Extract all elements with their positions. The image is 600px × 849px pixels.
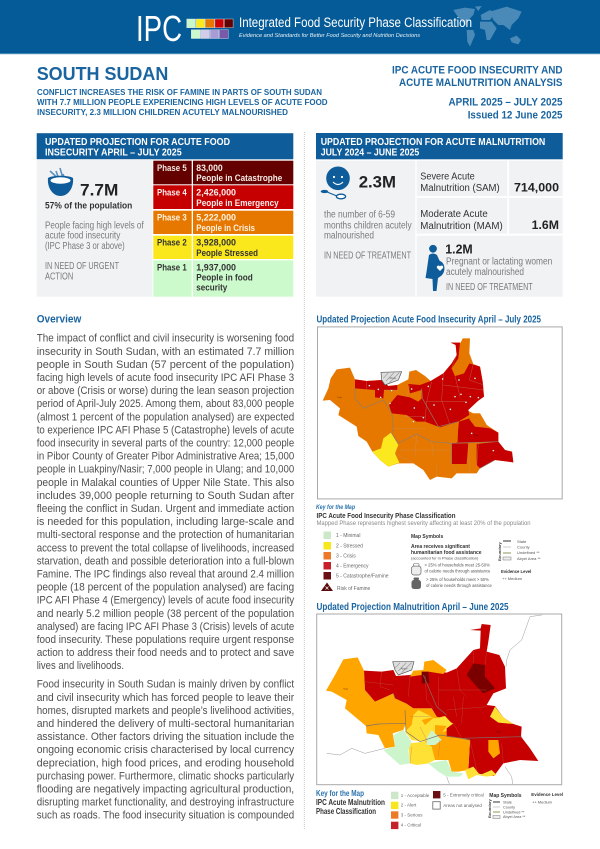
evidence level	[531, 792, 563, 804]
description: ACTION	[45, 271, 73, 282]
malnutrition swatches: 3 - Serious	[401, 812, 423, 818]
map symbols: humanitarian food assistance	[411, 550, 482, 556]
panel heading	[37, 133, 293, 159]
organisation name: Integrated Food Security Phase Classification	[239, 15, 472, 30]
text block: overview paragraph 2: Food insecurity in South Sudan is mainly driven by conflict	[37, 679, 294, 691]
phase swatches: 1 - Minimal	[336, 533, 360, 539]
legend: malnutrition map key: IPC Acute Malnutrition	[316, 798, 385, 807]
Abyei not analysed	[393, 662, 414, 675]
phase 4 row	[153, 185, 293, 209]
subtitle: INSECURITY, 2.3 MILLION CHILDREN ACUTELY MALNOURISHED	[37, 107, 288, 117]
boundary key: County	[517, 544, 530, 550]
phase 2 row	[153, 236, 293, 259]
phase 1 row: security	[196, 283, 228, 294]
green acceptable areas	[383, 730, 463, 777]
map: acute malnutrition	[317, 614, 562, 785]
map symbols: of calorie needs through assistance	[426, 583, 493, 588]
phase 5 row: Phase 5	[157, 163, 187, 174]
panel: acute malnutrition	[316, 133, 563, 297]
text block: overview paragraph 1: IPC AFI Phase 4 (Emergency) levels of acute food insecurity	[37, 595, 295, 607]
text block: overview paragraph 1: food insecurity. These populations require urgent response	[37, 634, 294, 646]
phase 5 row	[153, 161, 293, 184]
heading: malnutrition map: Updated Projection Malnutrition April – June 2025	[316, 602, 509, 613]
Abyei not analysed: Abyei	[401, 666, 408, 670]
red critical area	[364, 624, 538, 776]
icon: bowl of grain	[48, 168, 73, 196]
evidence level: Evidence Level	[531, 792, 563, 797]
stat caption: 57% of the population	[45, 199, 133, 210]
text block: overview paragraph 2: ongoing economic crisis characterised by local currency	[37, 744, 295, 756]
phase swatches	[324, 532, 389, 580]
phase swatches: 2 - Stressed	[336, 544, 363, 550]
orange western area	[326, 657, 406, 748]
phase 5 row: 83,000	[196, 163, 223, 174]
phase 2 row: People Stressed	[196, 248, 258, 259]
text block: overview paragraph 2: flooding are negatively impacting agricultural production,	[37, 784, 294, 796]
panel heading: UPDATED PROJECTION FOR ACUTE MALNUTRITION	[321, 137, 545, 148]
orange spots	[422, 717, 447, 735]
legend: food insecurity map key: Key for the Map	[316, 504, 355, 511]
analysis title and dates	[392, 64, 563, 121]
text block: overview paragraph 1: people in Malakal counties of Upper Nile State. This also	[37, 477, 294, 489]
map symbols: County	[503, 806, 515, 810]
text block: overview paragraph 1: to experience IPC AFI Phase 5 (Catastrophe) levels of acute	[37, 424, 294, 436]
state boundaries	[366, 675, 522, 742]
orange patches	[443, 358, 491, 442]
description: IN NEED OF TREATMENT	[324, 250, 411, 261]
map symbols: (accounted for in Phase classification)	[411, 556, 479, 560]
stat: pregnant or lactating women: acutely malnourished	[446, 267, 524, 278]
malnutrition swatches: Areas not analysed	[443, 803, 482, 808]
icon: risk of famine	[321, 582, 371, 592]
panel heading: JULY 2024 – JUNE 2025	[321, 148, 419, 159]
phase 4 row: People in Emergency	[196, 198, 279, 209]
text block: overview paragraph 2: assistance. Other factors driving the situation include the	[37, 731, 294, 743]
map symbols: Map Symbols	[489, 793, 522, 799]
subtitle: CONFLICT INCREASES THE RISK OF FAMINE IN PARTS OF SOUTH SUDAN	[37, 87, 322, 97]
analysis title and dates: APRIL 2025 – JULY 2025	[448, 97, 562, 109]
malnutrition swatches: 2 - Alert	[401, 802, 417, 808]
orange base	[323, 338, 513, 480]
text block: overview paragraph 1: fleeing the conflict in Sudan. Urgent and immediate action	[37, 503, 294, 515]
header banner	[0, 0, 600, 54]
analysis title and dates: Issued 12 June 2025	[468, 109, 562, 121]
map symbols: Undefined **	[503, 810, 525, 814]
icon: child with spoon	[321, 166, 350, 199]
text block: overview paragraph 2: such as roads. The food insecurity situation is compounded	[37, 810, 294, 822]
text block: overview paragraph 2: homes, disrupted markets and people’s livelihood activities,	[37, 705, 294, 717]
map symbols	[411, 534, 493, 589]
text block: overview paragraph 1: multi-sectoral response and the protection of humanitarian	[37, 529, 294, 541]
moderate acute malnutrition: Moderate Acute	[420, 209, 488, 220]
county labels: Raga	[337, 397, 343, 399]
text block: overview paragraph 1: food insecurity in several parts of the country: 12,000 people	[37, 438, 294, 450]
county labels: Raga	[343, 689, 349, 691]
yellow alert areas	[405, 707, 513, 779]
text block: overview paragraph 2: and hindered the delivery of multi-sectoral humanitarian	[37, 718, 294, 730]
phase swatches: 4 - Emergency	[336, 564, 369, 570]
Abyei not analysed	[381, 372, 402, 385]
legend: malnutrition map key: Key for the Map	[316, 789, 364, 798]
county boundaries	[367, 355, 484, 477]
phase 1 row	[153, 260, 293, 297]
analysis title and dates: ACUTE MALNUTRITION ANALYSIS	[399, 77, 563, 89]
malnutrition swatches: 5 - Extremely critical	[443, 792, 484, 798]
text block: overview paragraph 1: lives and livelihoods.	[37, 660, 124, 672]
evidence level: ++ Medium	[502, 576, 523, 581]
panel heading: UPDATED PROJECTION FOR ACUTE FOOD	[45, 137, 230, 148]
malnutrition swatches	[391, 791, 484, 829]
subtitle	[37, 87, 328, 117]
Abyei not analysed: Abyei	[389, 376, 396, 380]
panel: acute food insecurity	[37, 133, 293, 297]
legend: malnutrition map key	[316, 789, 563, 829]
text block: overview paragraph 2: disrupting market functionality, and destroying infrastructure	[37, 797, 294, 809]
text block: overview paragraph 2	[37, 679, 295, 822]
text block: overview paragraph 1: access to prevent the total collapse of livelihoods, increased	[37, 542, 294, 554]
IPC wordmark: IPC	[136, 8, 182, 49]
phase swatches: 5 - Catastrophe/Famine	[336, 574, 389, 580]
stat: pregnant or lactating women: IN NEED OF TREATMENT	[446, 282, 533, 293]
title: SOUTH SUDAN	[37, 63, 168, 84]
description: IN NEED OF URGENT	[45, 261, 119, 272]
text block: overview paragraph 1: people in South Sudan (57 percent of the population)	[37, 359, 294, 371]
tagline: Evidence and Standards for Better Food Security and Nutrition Decisions	[239, 33, 420, 39]
text block: overview paragraph 1: insecurity in South Sudan, with an estimated 7.7 million	[37, 346, 294, 358]
severe acute malnutrition: Malnutrition (SAM)	[420, 183, 500, 194]
heading: overview: Overview	[37, 314, 82, 326]
phase 4 row: 2,426,000	[196, 188, 236, 199]
evidence level: ++ Medium	[532, 800, 553, 804]
text block: overview paragraph 1: people (18 percent of the population analysed) are facing	[37, 582, 294, 594]
text block: overview paragraph 1: facing high levels of acute food insecurity IPC AFI Phase 3	[37, 372, 294, 384]
international borders	[327, 615, 542, 784]
red phase 4 areas	[355, 343, 513, 468]
assistance markers	[368, 377, 494, 451]
phase 3 row: Phase 3	[157, 213, 187, 224]
phase 2 row: 3,928,000	[196, 238, 236, 249]
legend: food insecurity map key	[316, 504, 541, 592]
evidence level: Evidence Level	[501, 569, 531, 574]
legend: malnutrition map key: Phase Classification	[316, 807, 376, 816]
icon: pregnant woman	[426, 245, 444, 291]
map symbols: Area receives significant	[411, 544, 470, 550]
text block: overview paragraph 2: depreciation, high food prices, and eroding household	[37, 757, 294, 769]
legend: food insecurity map key: IPC Acute Food Insecurity Phase Classification	[316, 513, 456, 520]
malnutrition swatches: 1 - Acceptable	[401, 793, 430, 798]
severe acute malnutrition: Severe Acute	[420, 171, 475, 182]
map symbols: State	[503, 800, 512, 804]
map symbols: of calorie needs through assistance	[424, 568, 491, 574]
county boundaries	[365, 650, 503, 770]
text block: overview paragraph 1: in Pibor County of Greater Pibor Administrative Area; 15,000	[37, 451, 294, 463]
boundary key	[497, 539, 541, 561]
description: the number of 6-59	[324, 210, 395, 221]
text block: overview paragraph 1: is needed for this population, including large-scale and	[37, 516, 294, 528]
text block: overview paragraph 1: Famine. The IPC findings also reveal that around 2.4 million	[37, 568, 294, 580]
icon: risk of famine: Risk of Famine	[337, 586, 371, 592]
map: acute food insecurity: Pibor	[474, 434, 479, 437]
logo colour squares	[187, 19, 233, 38]
phase 4 row: Phase 4	[157, 188, 187, 199]
stat: pregnant or lactating women	[445, 242, 552, 293]
stat: pregnant or lactating women: 1.2M	[445, 242, 473, 256]
text block: overview paragraph 1: and nearly 5.2 million people (38 percent of the population	[37, 608, 294, 620]
text block: overview paragraph 1	[37, 333, 295, 672]
description: malnourished	[324, 230, 374, 241]
panel heading	[316, 133, 563, 159]
map symbols	[487, 793, 526, 819]
text block: overview paragraph 2: purchasing power. Furthermore, climatic shocks particularly	[37, 770, 295, 782]
description	[45, 220, 144, 282]
description: months children acutely	[324, 220, 412, 231]
text block: overview paragraph 1: The impact of conflict and civil insecurity is worsening food	[37, 333, 294, 345]
phase 1 row: 1,937,000	[196, 263, 236, 274]
phase swatches: 3 - Crisis	[336, 554, 356, 560]
panel heading: INSECURITY APRIL – JULY 2025	[45, 148, 182, 159]
subtitle: WITH 7.7 MILLION PEOPLE EXPERIENCING HIGH LEVELS OF ACUTE FOOD	[37, 97, 328, 107]
phase 3 row	[153, 211, 293, 234]
state boundaries	[355, 388, 498, 468]
severe acute malnutrition	[420, 171, 559, 195]
map: acute malnutrition: Pibor	[497, 731, 502, 734]
yellow phase 2 area	[372, 433, 399, 467]
boundary key: Abyei Area **	[517, 556, 541, 561]
heading: food insecurity map: Updated Projection Acute Food Insecurity April – July 2025	[316, 314, 541, 326]
description: People facing high levels of	[45, 220, 144, 231]
stat: 2.3M: 2.3M	[359, 173, 396, 192]
map symbols: Boundary	[487, 799, 492, 818]
central orange area	[406, 703, 470, 772]
phase 3 row: People in Crisis	[196, 223, 255, 234]
boundary key: State	[517, 539, 527, 544]
map symbols: > 25% of households meet 25-50%	[424, 562, 490, 568]
moderate acute malnutrition: Malnutrition (MAM)	[420, 221, 503, 232]
phase 5 row: People in Catastrophe	[196, 173, 282, 184]
legend: food insecurity map key: Mapped Phase represents highest severity affecting at least 20% of the population	[316, 520, 531, 527]
phase 2 row: Phase 2	[157, 238, 187, 249]
description: acute food insecurity	[45, 231, 120, 242]
map symbols: Abyei Area **	[503, 815, 526, 819]
text block: overview paragraph 1: includes 39,000 people returning to South Sudan after	[37, 490, 295, 502]
boundary key: Undefined **	[517, 550, 540, 555]
maroon extremely critical areas	[422, 663, 495, 693]
text block: overview paragraph 1: period of April-July 2025. Among them, about 83,000 people	[37, 398, 294, 410]
icon: world map	[453, 6, 522, 47]
text block: overview paragraph 1: analysed) are facing IPC AFI Phase 3 (Crisis) levels of acute	[37, 621, 294, 633]
text block: overview paragraph 1: starvation, death and possible deterioration into a full-blown	[37, 555, 294, 567]
moderate acute malnutrition: 1.6M	[532, 218, 559, 232]
description	[324, 210, 412, 261]
map symbols: > 25% of households meet > 50%	[426, 577, 489, 582]
moderate acute malnutrition	[420, 209, 559, 232]
malnutrition swatches: 4 - Critical	[401, 822, 421, 828]
text block: overview paragraph 2: and civil insecurity which has forced people to leave their	[37, 692, 295, 704]
severe acute malnutrition: 714,000	[514, 181, 559, 195]
phase 1 row: Phase 1	[157, 263, 187, 274]
map: acute food insecurity	[318, 327, 562, 499]
evidence level	[501, 569, 531, 581]
stat: 7.7M: 7.7M	[80, 180, 118, 199]
phase 1 row: People in food	[196, 273, 253, 284]
text block: overview paragraph 1: (almost 1 percent of the population analysed) are expected	[37, 411, 294, 423]
analysis title and dates: IPC ACUTE FOOD INSECURITY AND	[392, 64, 562, 76]
text block: overview paragraph 1: action to address their food needs and to protect and save	[37, 647, 294, 659]
text block: overview paragraph 1: or above (Crisis or worse) during the lean season projection	[37, 385, 294, 397]
stat: pregnant or lactating women: Pregnant or lactating women	[446, 256, 552, 267]
map symbols: Map Symbols	[411, 534, 443, 540]
text block: overview paragraph 1: people in Luakpiny/Nasir; 7,000 people in Ulang; and 10,000	[37, 464, 294, 476]
description: (IPC Phase 3 or above)	[45, 241, 125, 252]
phase 3 row: 5,222,000	[196, 213, 236, 224]
boundary key: Boundary	[497, 542, 502, 561]
